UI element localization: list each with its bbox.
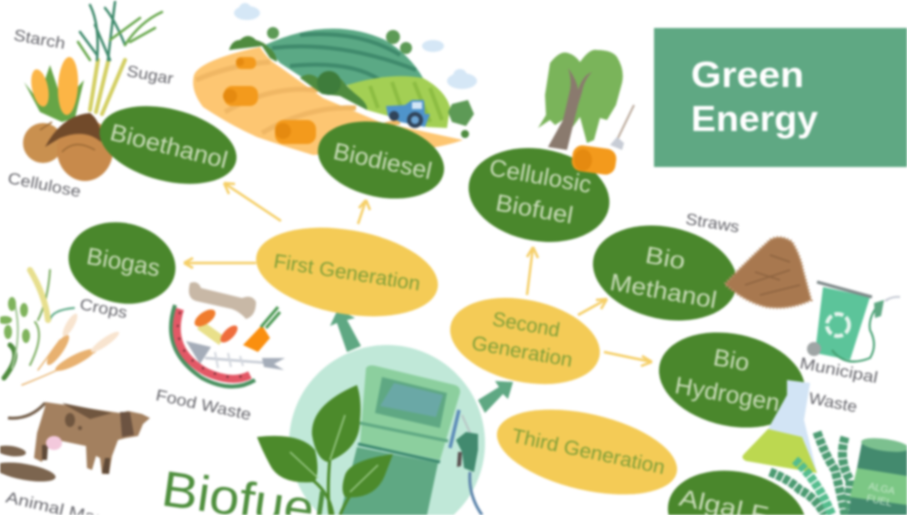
icon: apple core — [192, 306, 240, 345]
label: municipal waste: Municipal — [798, 355, 879, 387]
icon: fish bones — [186, 341, 285, 370]
banner: green energy — [654, 28, 907, 167]
node: bio methanol: Methanol — [608, 269, 719, 314]
node: cellulosic biofuel — [461, 137, 617, 253]
arrow: first generation to bioethanol — [224, 183, 281, 221]
node: first generation — [249, 215, 445, 329]
label: crops: Crops — [78, 296, 129, 322]
illustration: seaweed — [770, 432, 850, 515]
illustration: willow tree — [538, 50, 623, 150]
icon: bone — [189, 282, 256, 319]
node: cellulosic biofuel: Cellulosic — [487, 154, 593, 199]
node: third generation — [489, 394, 685, 510]
node: bioethanol — [91, 93, 245, 197]
arrow: second generation to cellulosic biofuel — [527, 247, 538, 295]
node: bio methanol — [584, 213, 746, 333]
label: municipal waste — [798, 355, 879, 416]
banner: green energy: Green — [691, 54, 804, 95]
node: biodiesel — [311, 111, 451, 209]
arrow: first generation to biogas — [184, 258, 256, 268]
icon: tractor — [386, 100, 430, 128]
label: starch: Starch — [12, 27, 66, 53]
arrow: first generation to biodiesel — [358, 200, 370, 224]
label: straws: Straws — [684, 211, 740, 236]
node: cellulosic biofuel: Biofuel — [494, 190, 575, 230]
node: bio hydrogen — [650, 320, 814, 440]
node: bioethanol: Bioethanol — [107, 119, 230, 174]
icon arrow: pump to first generation — [330, 309, 361, 352]
icon: algae fuel barrel — [848, 436, 907, 515]
node: first generation: First Generation — [272, 251, 422, 296]
icon: recycling bin with fuel hose — [807, 282, 900, 362]
arrow: second generation to bio hydrogen — [604, 352, 652, 366]
illustration: flask — [742, 380, 817, 473]
illustration: hay bale and pitchfork — [570, 105, 634, 176]
illustration: straw pile — [725, 237, 811, 308]
illustration: crops and wheat — [0, 270, 121, 385]
node: second generation — [442, 285, 608, 397]
label: municipal waste: Waste — [807, 390, 859, 416]
label: sugar: Sugar — [125, 63, 175, 88]
node: bio methanol: Bio — [643, 242, 687, 275]
node: bio hydrogen: Bio — [711, 344, 751, 377]
node: second generation: Second — [491, 308, 561, 342]
banner: green energy: Energy — [691, 98, 818, 139]
illustration: farm landscape — [193, 3, 477, 155]
illustration: corn, sugar cane and wood — [23, 2, 162, 181]
icon: algae fuel barrel: FUEL — [865, 493, 893, 509]
node: algal fuel — [659, 458, 815, 515]
node: third generation: Third Generation — [510, 425, 667, 479]
arrow: second generation to bio methanol — [578, 299, 607, 315]
illustration: cow and manure — [0, 402, 150, 485]
node: bio hydrogen: Hydrogen — [673, 372, 782, 417]
node: second generation: Generation — [470, 332, 574, 372]
icon: carrot — [243, 307, 280, 352]
label: cellulose: Cellulose — [6, 170, 82, 201]
icon arrow: pump to second generation — [478, 381, 513, 413]
illustration: food waste — [171, 282, 285, 387]
illustration: biofuel pump with leaves — [257, 345, 485, 515]
node: biodiesel: Biodiesel — [331, 138, 434, 185]
node: biogas — [61, 213, 183, 313]
icon: algae fuel barrel: ALGA — [867, 481, 896, 498]
label: food waste: Food Waste — [154, 387, 253, 424]
node: biogas: Biogas — [85, 243, 162, 282]
icon: watermelon slice — [171, 305, 255, 387]
